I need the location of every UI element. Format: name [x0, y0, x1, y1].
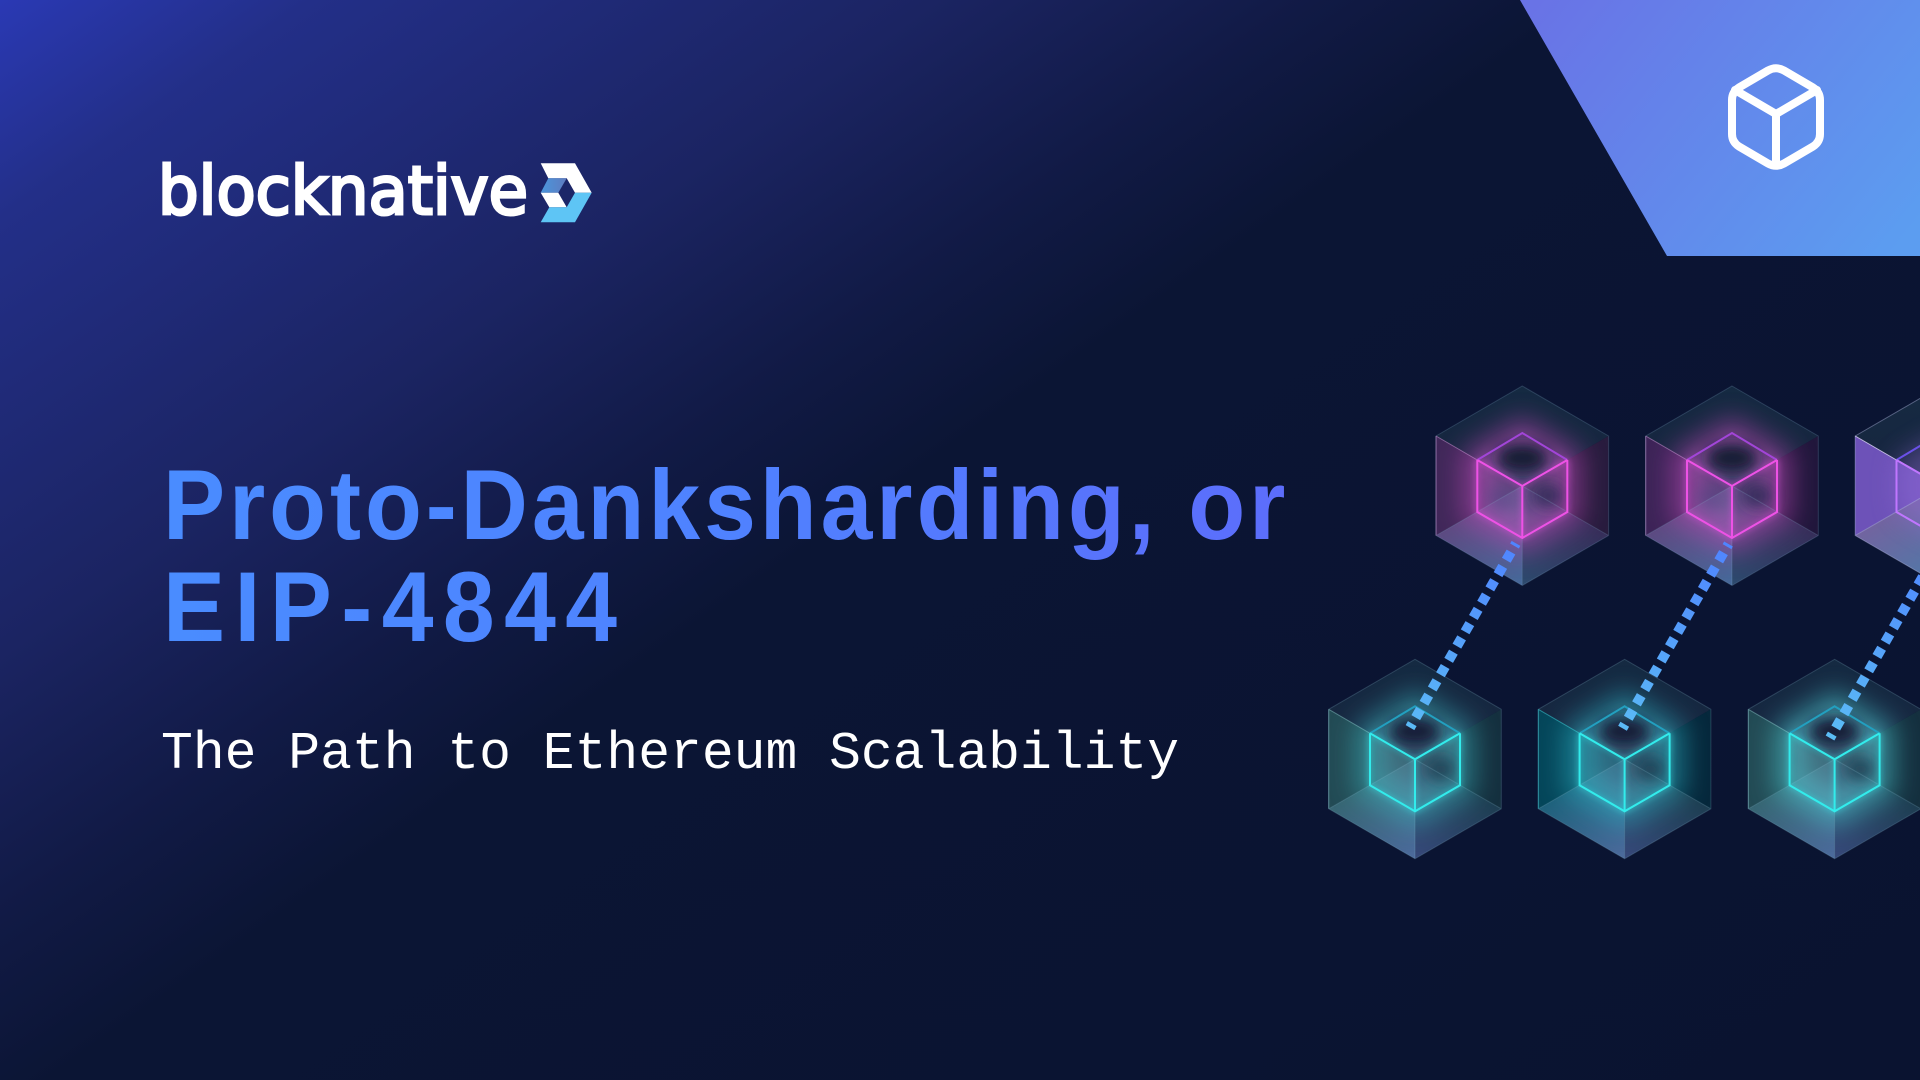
- block: pink 1: [1436, 386, 1609, 586]
- title: Proto-Danksharding, or: [163, 450, 1285, 561]
- illustration: blocks and links: [1329, 386, 1920, 859]
- icon: white cube outline: [1732, 68, 1820, 166]
- block: teal 3 (cropped at right edge): [1748, 659, 1920, 859]
- block: pink 2: [1646, 386, 1818, 586]
- dotted link 2: [1622, 544, 1728, 728]
- logo wordmark: blocknative: [158, 152, 528, 230]
- subtitle: The Path to Ethereum Scalability: [161, 724, 1179, 784]
- dotted link 3: [1830, 554, 1920, 738]
- block: purple (cropped at right edge): [1854, 398, 1920, 574]
- panel: top-right corner: [1520, 0, 1920, 256]
- block: teal 1: [1329, 659, 1501, 859]
- dotted link 1: [1410, 543, 1516, 728]
- title: EIP-4844: [163, 552, 617, 663]
- block: teal 2: [1538, 659, 1711, 859]
- logo mark: [541, 163, 592, 222]
- logo: blocknative: [158, 152, 592, 230]
- title: [163, 450, 1285, 663]
